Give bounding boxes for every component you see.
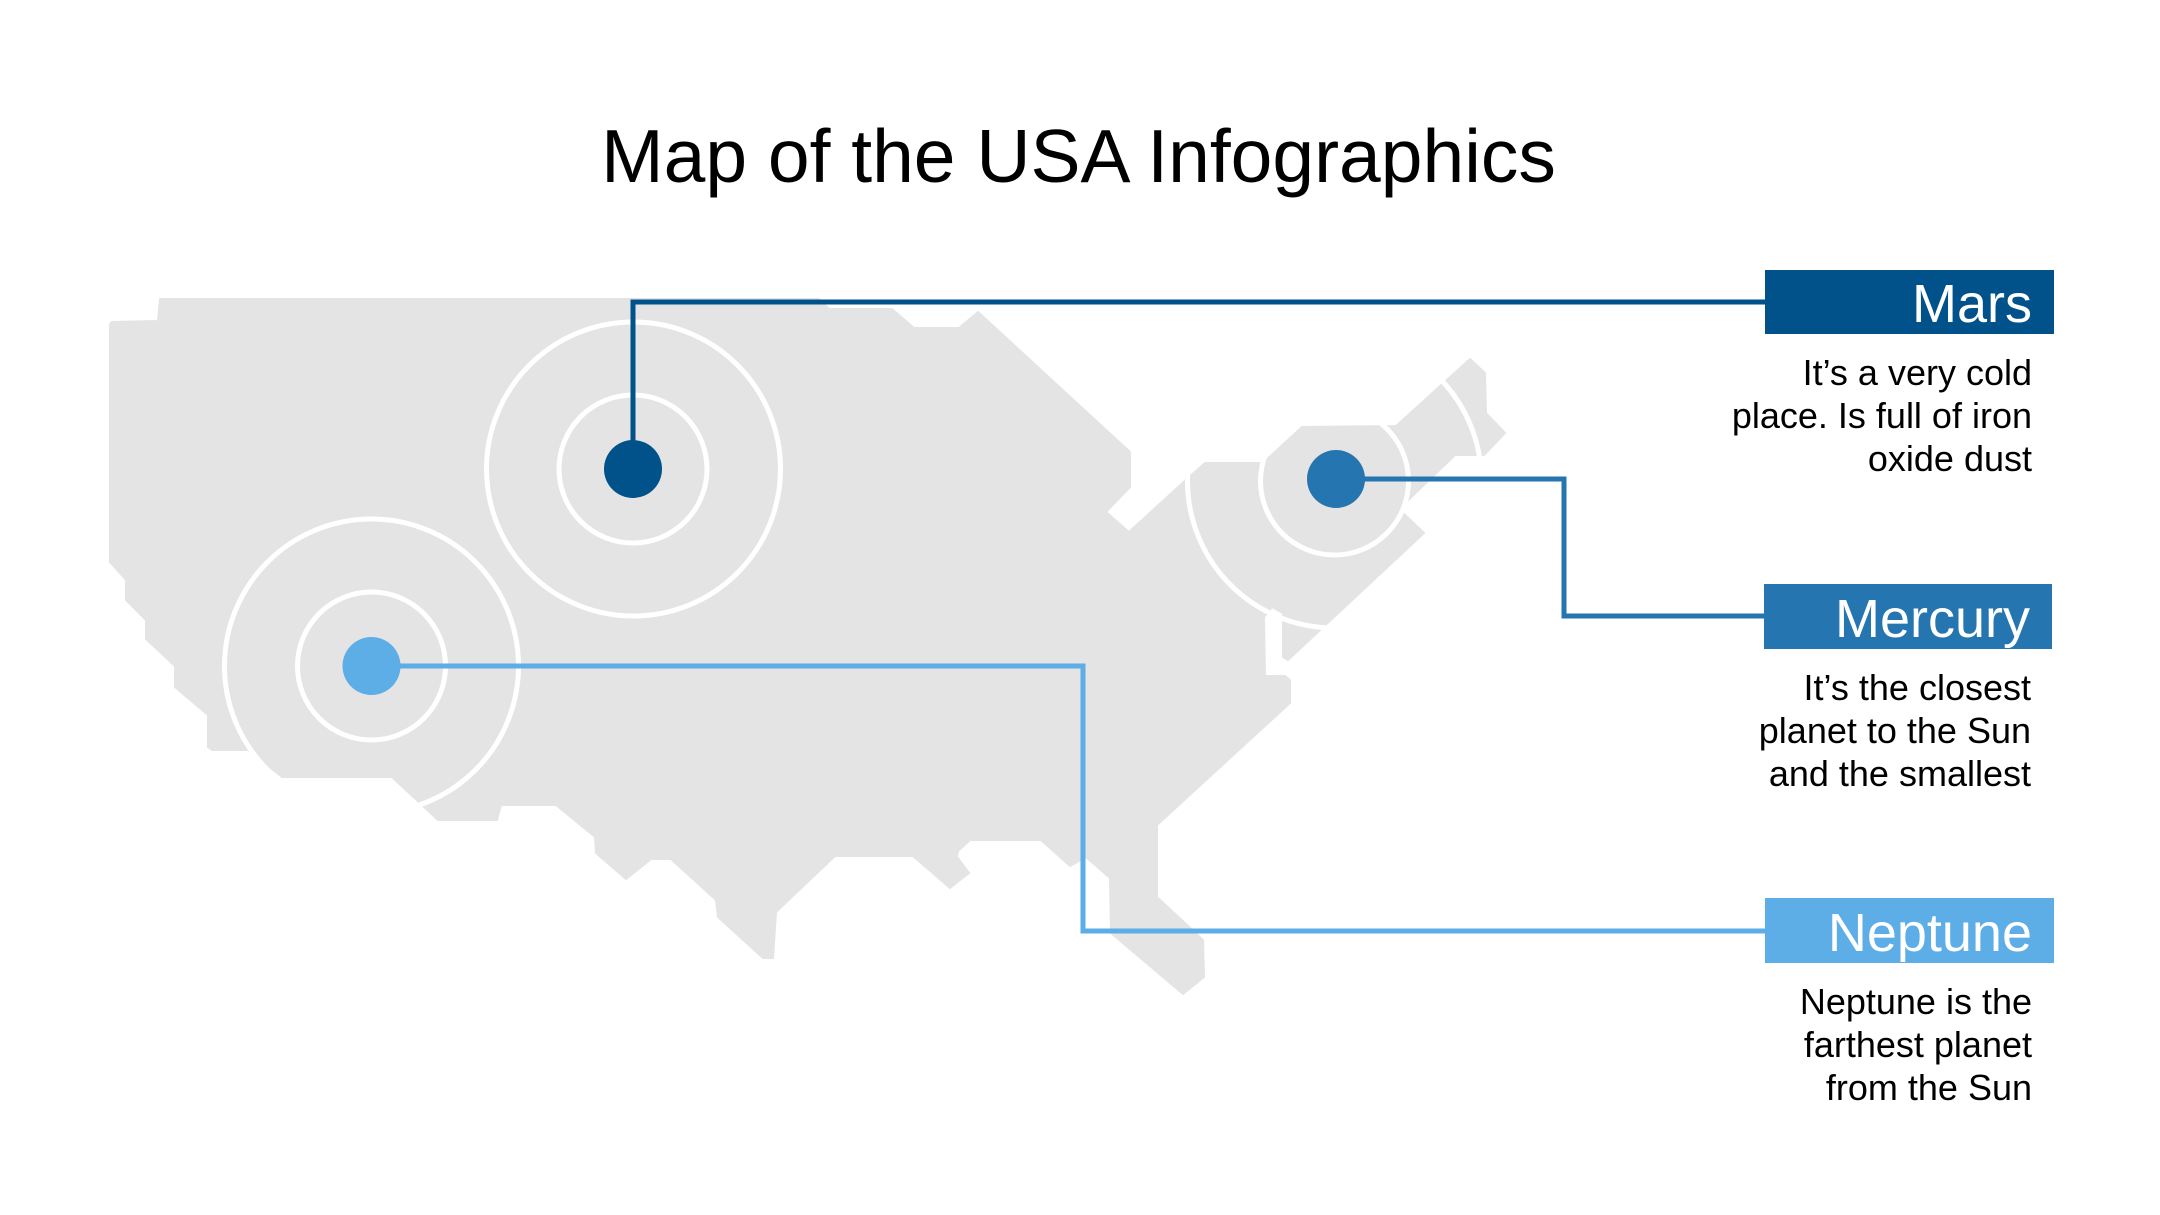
title: Map of the USA Infographics [601,114,1556,198]
Mars heading: Mars [1912,274,2032,334]
panel: Neptune [1765,898,2054,1108]
rings: Neptune location [224,519,518,813]
Neptune description: from the Sun [1826,1067,2032,1108]
Neptune description: Neptune is the [1800,981,2032,1022]
connector: Mars [633,302,1765,469]
marker: Neptune [342,637,400,695]
Mars description: It’s a very cold [1803,352,2032,393]
Mercury description [1759,667,2031,794]
panel: Mercury [1759,584,2052,794]
Mars description: place. Is full of iron [1732,395,2032,436]
Mercury description: planet to the Sun [1759,710,2031,751]
panel: Mars [1732,270,2054,479]
connector: Neptune [371,666,1765,931]
Neptune heading: Neptune [1828,903,2032,963]
Mars heading [1765,270,2054,334]
map of the USA [110,299,1505,994]
marker: Mercury [1307,450,1365,508]
rings: Mars location [486,322,780,616]
Mercury description: It’s the closest [1804,667,2031,708]
Neptune heading [1765,898,2054,963]
Mars description [1732,352,2032,479]
connector: Mercury [1336,479,1764,616]
Neptune description [1800,981,2032,1108]
Mercury description: and the smallest [1769,753,2031,794]
Mercury heading: Mercury [1835,589,2030,649]
Neptune description: farthest planet [1804,1024,2032,1065]
Mars description: oxide dust [1868,438,2032,479]
rings: Mercury location [1188,334,1482,628]
Mercury heading [1764,584,2052,649]
marker: Mars [604,440,662,498]
